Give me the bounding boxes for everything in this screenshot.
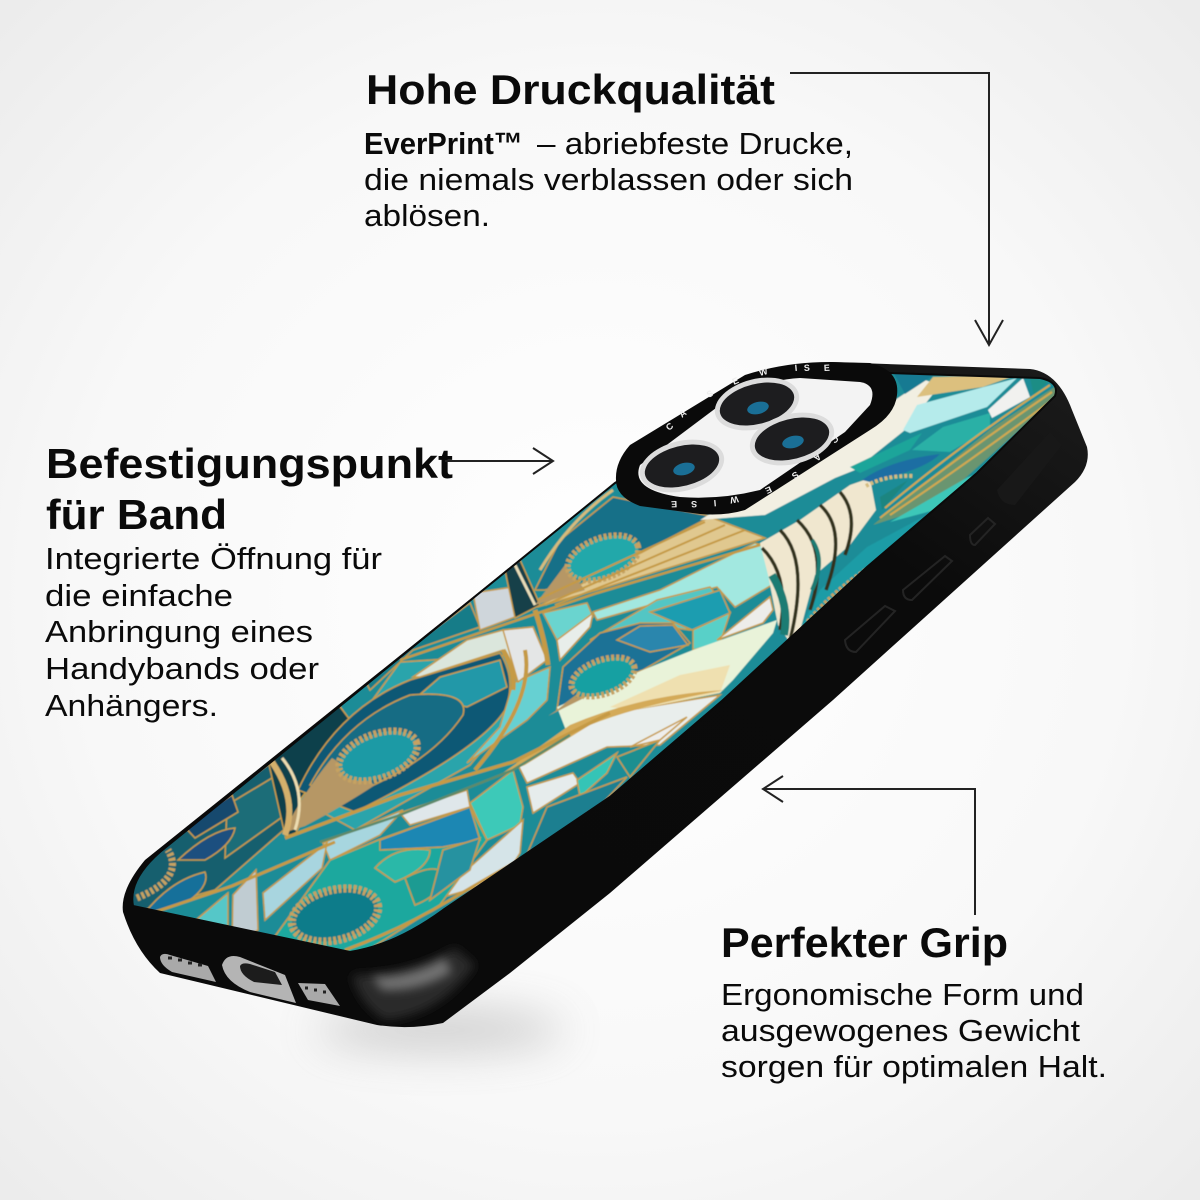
heading: Perfekter Grip (721, 919, 1008, 966)
camera island (616, 362, 897, 514)
large eye inner shell (310, 694, 464, 797)
upper left dark teal (365, 603, 480, 690)
usb port (222, 956, 296, 1003)
middle blue shell (557, 623, 690, 710)
turquoise panel (912, 413, 990, 452)
arrow: grip (763, 776, 975, 915)
lenses (634, 369, 840, 501)
top right mint (903, 378, 1017, 433)
speaker right (298, 983, 340, 1006)
ribbed feather (760, 478, 876, 650)
body text: – abriebfeste Drucke, (537, 126, 853, 161)
body text: ablösen. (364, 198, 490, 233)
cream near camera (700, 380, 940, 520)
teal panel (850, 433, 922, 473)
body text: ausgewogenes Gewicht (721, 1013, 1080, 1048)
top fan (537, 517, 765, 607)
body text: Anbringung eines (45, 614, 313, 649)
dark stripes edge (268, 700, 350, 835)
lower mint panel (470, 770, 523, 840)
right teal region (803, 518, 920, 624)
white chip right (717, 597, 773, 640)
body text: EverPrint™ (364, 126, 523, 161)
mint bands (467, 667, 550, 763)
camera opening (638, 378, 872, 498)
body text: Handybands oder (45, 651, 319, 686)
body text: sorgen für optimalen Halt. (721, 1049, 1107, 1084)
body text: die einfache (45, 578, 233, 613)
body text: Anhängers. (45, 688, 218, 723)
body text (364, 126, 853, 233)
blue panel (862, 454, 940, 482)
mint small panels (543, 603, 593, 640)
arrow: print quality (790, 73, 1003, 345)
pale panel (413, 627, 547, 680)
gold swoop (500, 690, 725, 775)
bezel edge (132, 370, 1056, 952)
large eye navy shell (298, 653, 510, 812)
arrow: strap attachment (445, 448, 553, 474)
feature: strap attachment (45, 440, 453, 723)
small beads (866, 476, 913, 486)
lower eye fan (265, 807, 487, 955)
feature: print quality (364, 66, 853, 233)
upper eye beads (535, 527, 645, 605)
dark teal upper (535, 497, 710, 590)
edge beads (585, 809, 590, 812)
brand ring text: CASEWISECASEWISE (664, 363, 841, 509)
top corner teal (1030, 378, 1048, 396)
small dark teal panel (880, 480, 908, 510)
corner beads (137, 850, 172, 898)
camera ring (616, 362, 897, 514)
pale marble chips (400, 790, 470, 825)
pale stripe feather (557, 620, 777, 733)
printed artwork (120, 360, 1070, 960)
heading: Befestigungspunkt (46, 440, 453, 487)
heading: Hohe Druckqualität (366, 66, 775, 113)
feature: grip (721, 919, 1107, 1084)
bottom corner shine (352, 948, 475, 1020)
large eye beads (289, 726, 422, 832)
body text: die niemals verblassen oder sich (364, 162, 853, 197)
action cutout (997, 432, 1062, 505)
top feather stripes (873, 386, 1056, 525)
body text: Integrierte Öffnung für (45, 541, 382, 576)
top gold feather (917, 375, 1017, 397)
middle eye beads (548, 650, 640, 716)
artwork base (160, 374, 1054, 944)
body text (721, 977, 1107, 1084)
phone case (120, 360, 1088, 1027)
bead ring right (808, 569, 868, 622)
gold flow lines (155, 490, 760, 950)
lower feather teal (890, 475, 975, 522)
mint top band (593, 543, 780, 620)
white marble (473, 587, 515, 630)
case body (123, 362, 1088, 1027)
heading (46, 440, 453, 538)
lower eye beads (287, 884, 383, 946)
body text (45, 541, 382, 723)
stained glass panels (125, 497, 780, 955)
outer mint of large eye (300, 655, 525, 830)
body text: Ergonomische Form und (721, 977, 1084, 1012)
upper mint shell (590, 587, 730, 640)
phone shadow (315, 1010, 565, 1050)
top dark teal (892, 370, 937, 394)
lower left fan panels (133, 765, 284, 908)
side buttons (845, 518, 995, 652)
striped fan (505, 560, 540, 618)
heading: für Band (46, 491, 227, 538)
white top chip (988, 378, 1030, 418)
lower right panels (527, 773, 580, 813)
speaker left (160, 954, 216, 982)
